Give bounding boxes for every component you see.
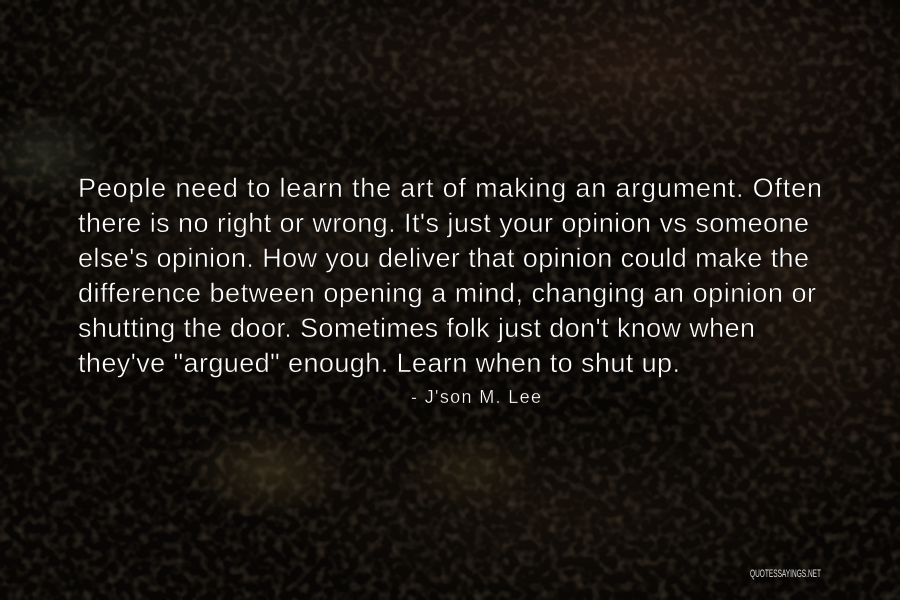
quote text: there is no right or wrong. It's just your opinion vs someone	[78, 208, 809, 238]
quote text: difference between opening a mind, changing an opinion or	[78, 278, 816, 308]
attribution: - J'son M. Lee	[411, 387, 541, 407]
quote text	[78, 173, 822, 378]
quote text: People need to learn the art of making an argument. Often	[78, 173, 822, 203]
quote text: else's opinion. How you deliver that opinion could make the	[78, 243, 809, 273]
quote text: they've "argued" enough. Learn when to shut up.	[78, 348, 680, 378]
quote text: shutting the door. Sometimes folk just don't know when	[78, 313, 755, 343]
watermark: QUOTESSAYINGS.NET	[750, 568, 821, 580]
